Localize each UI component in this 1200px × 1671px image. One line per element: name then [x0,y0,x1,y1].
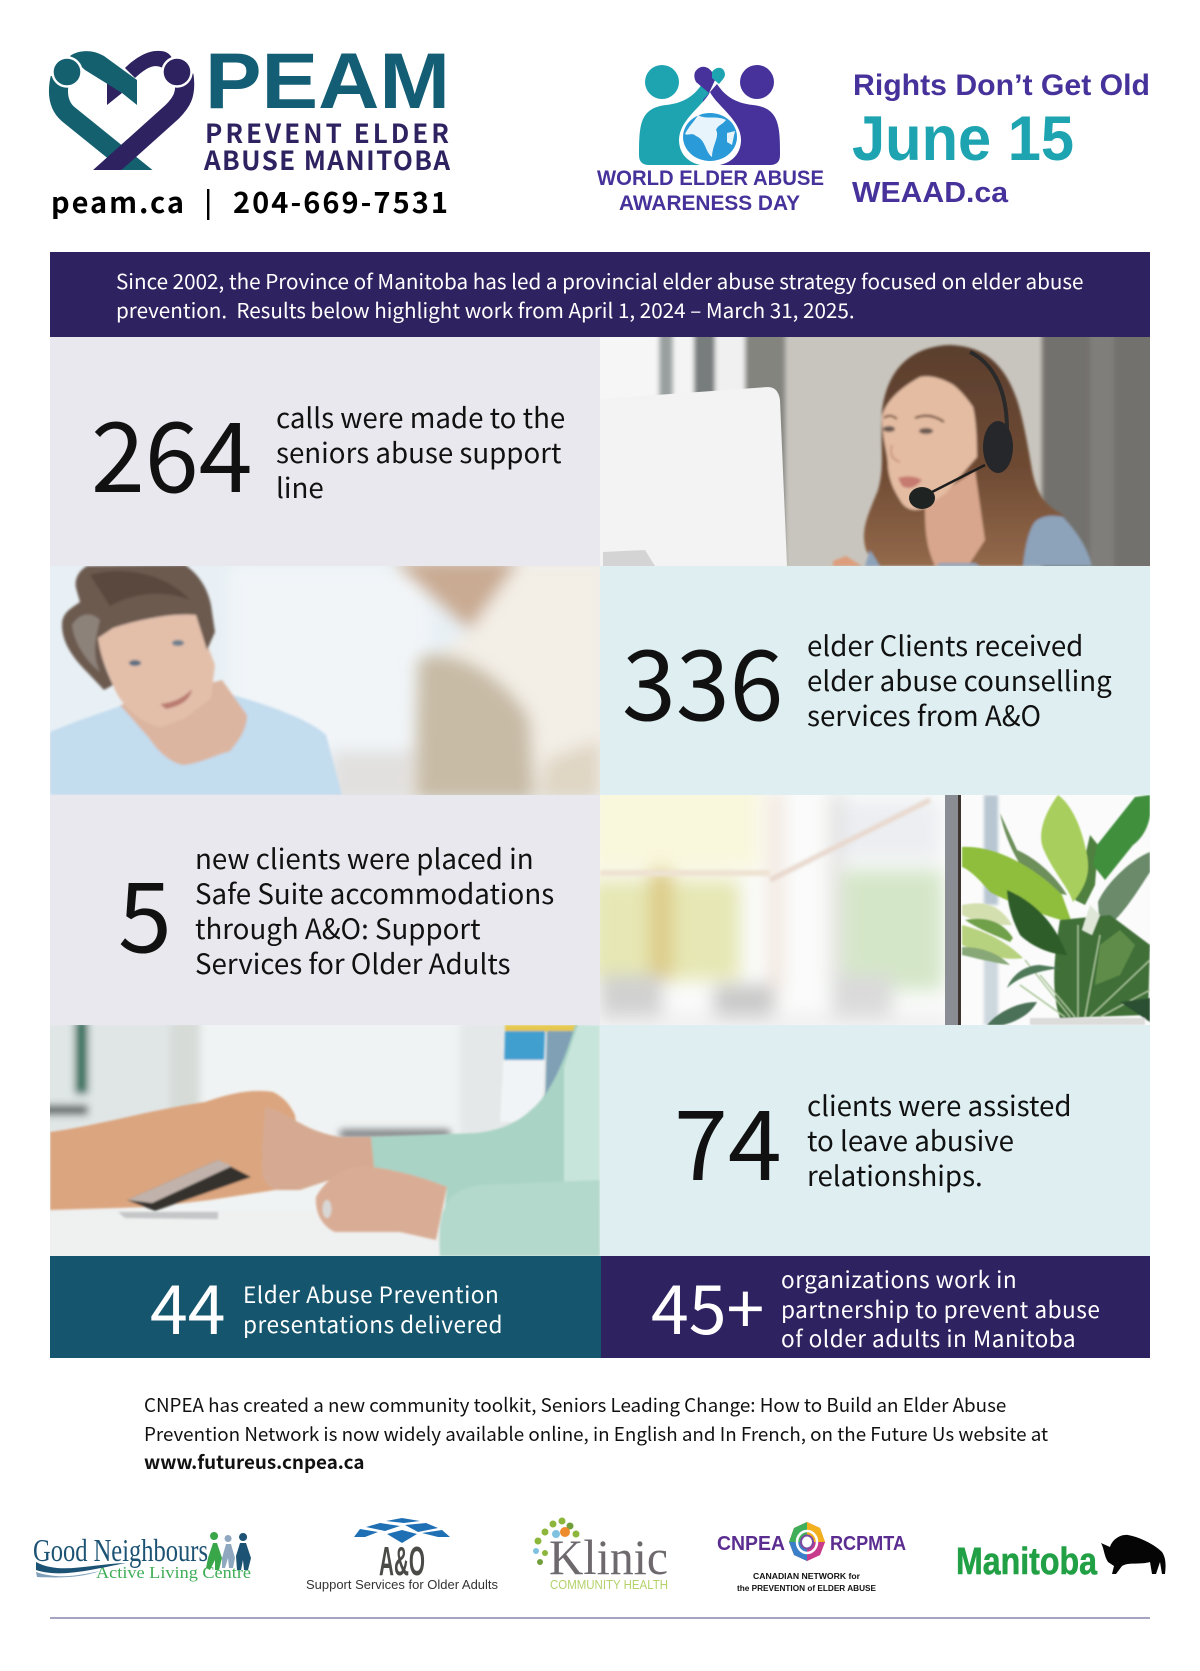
headset [909,352,1013,509]
logo text: Awareness Day: AWARENESS DAY [619,192,800,215]
text: safe suite: through A&O: Support [195,907,481,947]
number 45+: 45+ [651,1255,764,1354]
text: safe suite: Services for Older Adults [195,942,510,982]
window column [945,795,998,1025]
logo: Good Neighbours [33,1532,251,1582]
intro text: Since 2002, the Province of Manitoba has led a provincial elder abuse strategy focused on elder abuse [116,265,1084,295]
text: organizations: partnership to prevent abuse [781,1292,1100,1324]
website: peam.ca [51,180,184,222]
number 336: 336 [622,607,784,748]
logo: Klinic [533,1518,668,1592]
text: counselling: elder Clients received [807,624,1083,664]
date: June 15: June 15 [852,104,1074,174]
toolkit paragraph: www.futureus.cnpea.ca [144,1448,364,1475]
intro text: prevention. Results below highlight work from April 1, 2024 – March 31, 2025. [116,294,855,324]
text: abusive relationships: to leave abusive [807,1119,1014,1159]
panel: 74 clients [600,1025,1150,1256]
text: safe suite [195,837,554,982]
text: organizations: of older adults in Manitoba [781,1321,1076,1354]
text: counselling: elder abuse counselling [807,659,1112,699]
logo tagline line 2: ABUSE MANITOBA [203,141,450,178]
logo: A&O [306,1518,498,1592]
text: calls: calls were made to the [276,396,565,436]
blurred window background [590,780,950,1030]
older woman [50,565,342,795]
logo: CNPEA RCPMTA: the PREVENTION of ELDER ABUSE [737,1584,877,1593]
photo: office window and plant [600,795,1150,1025]
text: organizations: organizations work in [781,1262,1017,1295]
header: logos and event details [48,36,1150,222]
panel: 336 elder clients [600,566,1150,795]
logo: Klinic: COMMUNITY HEALTH [550,1578,668,1592]
logo text: World Elder Abuse: WORLD ELDER ABUSE [597,167,824,190]
toolkit paragraph [144,1391,1048,1475]
logo: Good Neighbours: Active Living Centre [96,1563,251,1582]
logo: CNPEA RCPMTA: CNPEA [717,1533,785,1555]
photo: older woman listening [50,566,600,795]
slogan: Rights Don't Get Old: Rights Don’t Get Old [853,69,1150,102]
text: safe suite: Safe Suite accommodations [195,872,554,912]
text: counselling: services from A&O [807,694,1041,734]
photo: hands holding at a desk [50,1025,600,1256]
logo: Klinic: Klinic [549,1529,668,1585]
photo: call centre worker with headset [600,337,1150,566]
website: WEAAD.ca: WEAAD.ca [852,177,1009,209]
panel: 5 new clients [50,795,600,1025]
text: calls: line [276,466,324,506]
text: calls: seniors abuse support [276,431,561,471]
woman [833,345,1092,566]
hands and sleeve [50,1025,600,1256]
text: presentations: presentations delivered [243,1306,503,1340]
logo: A&O: Support Services for Older Adults [306,1577,498,1592]
toolkit paragraph: CNPEA has created a new community toolkit, Seniors Leading Change: How to Build an Elder Abuse [144,1391,1006,1418]
text: counselling [807,624,1112,734]
monitor [600,387,787,566]
blurred office background [40,1020,590,1140]
text: calls [276,396,565,506]
phone number: 204-669-7531 [233,180,448,222]
number 74: 74 [674,1067,782,1208]
partner logos [33,1518,1166,1619]
logo: CNPEA RCPMTA [717,1522,906,1593]
footer rule [50,1617,1150,1619]
logo: CNPEA RCPMTA: RCPMTA [830,1533,906,1555]
panel: 264 calls [50,337,600,566]
logo: Manitoba with bison: Manitoba [956,1541,1098,1583]
panel: 45+ organizations [601,1256,1150,1358]
text: presentations [243,1277,503,1340]
text: abusive relationships [807,1084,1072,1194]
binder [500,1025,578,1122]
intro banner [50,252,1150,337]
number 5: 5 [118,839,172,980]
logo: World Elder Abuse Awareness Day [639,65,780,166]
number 264: 264 [91,379,253,520]
text: safe suite: new clients were placed in [195,837,534,877]
text: organizations [781,1262,1100,1354]
panel: 44 presentations [50,1256,601,1358]
toolkit paragraph: Prevention Network is now widely available online, in English and In French, on the Future Us website at [144,1420,1048,1446]
logo: PEAM heart [52,51,192,181]
text: abusive relationships: relationships. [807,1154,983,1194]
plant [962,795,1150,1025]
text: abusive relationships: clients were assisted [807,1084,1072,1124]
desk [50,1210,600,1256]
intro text [116,265,1084,324]
logo: A&O: A&O [379,1538,425,1584]
logo: CNPEA RCPMTA: CANADIAN NETWORK for [753,1572,860,1581]
separator [207,189,209,220]
number 44: 44 [150,1255,225,1354]
logo: Manitoba with bison [956,1535,1166,1583]
text: presentations: Elder Abuse Prevention [243,1277,499,1310]
logo: Good Neighbours: Good Neighbours [33,1532,208,1568]
logo wordmark: PEAM: PEAM [205,36,450,125]
blurred second person [331,560,610,802]
logo tagline line 1: PREVENT ELDER [205,114,449,151]
